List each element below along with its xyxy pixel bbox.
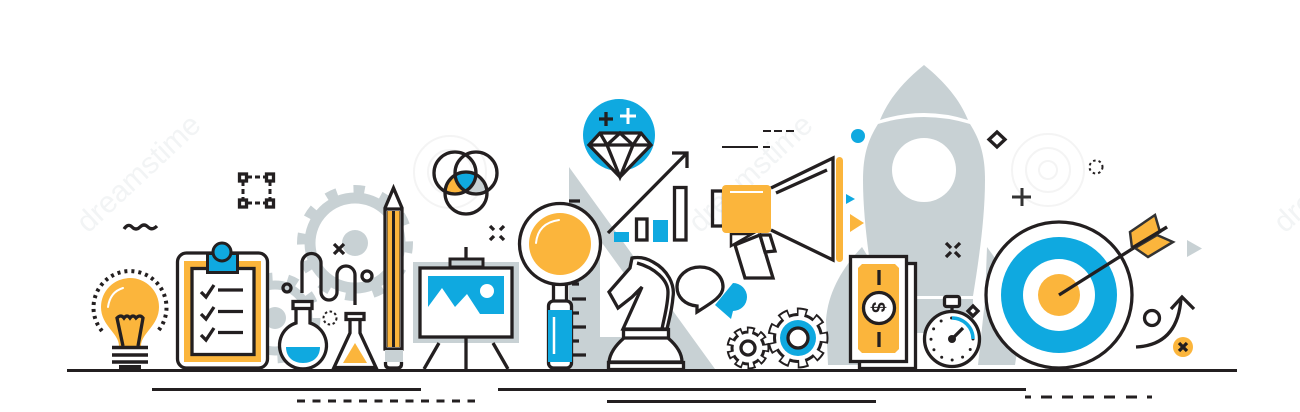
- checklist: [201, 285, 243, 340]
- icon: magnifying glass: [520, 204, 600, 368]
- easel picture: [428, 276, 504, 314]
- icon: sparkle cross: [490, 226, 504, 240]
- clipboard clip: [208, 243, 238, 272]
- icon: blue dot: [851, 129, 865, 143]
- icon: pencil: [385, 188, 403, 368]
- icon: chess knight: [608, 258, 684, 370]
- icon: dotted circle: [1090, 160, 1102, 174]
- icon: presentation easel: [413, 247, 519, 369]
- icon: target with dart: [986, 215, 1173, 368]
- icon: small ring: [1144, 310, 1160, 326]
- icon: diamond badge: [583, 99, 655, 177]
- icon: curved arrow: [1136, 297, 1194, 347]
- icon: clipboard: [178, 243, 268, 368]
- icon: blue speech bubble: [715, 283, 747, 319]
- icon: small outline gear: [730, 330, 766, 366]
- icon: light bulb: [94, 271, 166, 369]
- watermark: dreamstime: [70, 108, 207, 239]
- icon: conical flask: [334, 314, 376, 368]
- icon: dollar bill: [850, 256, 916, 368]
- icon: diamond outline: [989, 132, 1005, 147]
- icon: megaphone: [712, 157, 864, 278]
- icon: squiggle: [124, 225, 157, 229]
- ground line: [67, 369, 1237, 372]
- icon: small circles: [283, 271, 372, 324]
- infographic illustration: [67, 65, 1300, 403]
- growth bar chart with arrow: [608, 153, 687, 242]
- rocket: [826, 65, 1022, 365]
- icon: round flask: [280, 302, 326, 369]
- icon: gray play triangle: [1187, 240, 1202, 257]
- icon: outline speech bubble: [677, 267, 723, 312]
- small gray gear: [234, 277, 316, 359]
- icon: orange x badge: [1173, 337, 1193, 357]
- icon: large outline gear: [772, 312, 824, 364]
- icon: stopwatch: [924, 296, 980, 366]
- dart: [1059, 215, 1173, 295]
- icon: cross mark on gear: [334, 244, 344, 254]
- icon: venn circles: [434, 152, 497, 214]
- lower lines and dashes: [152, 388, 1152, 403]
- watermark: [70, 108, 1300, 239]
- icon: selection square: [240, 174, 274, 207]
- large gray gear: [302, 190, 408, 296]
- icon: sparkle on rocket: [946, 243, 960, 257]
- triangle ruler: [569, 167, 715, 369]
- icon: dollar bill: $: [867, 302, 888, 313]
- icon: dashes near megaphone: [722, 131, 794, 147]
- icon: plus sign: [1012, 188, 1031, 206]
- icon: chemistry tube: [302, 254, 355, 305]
- watermark: dreamstime: [682, 108, 819, 239]
